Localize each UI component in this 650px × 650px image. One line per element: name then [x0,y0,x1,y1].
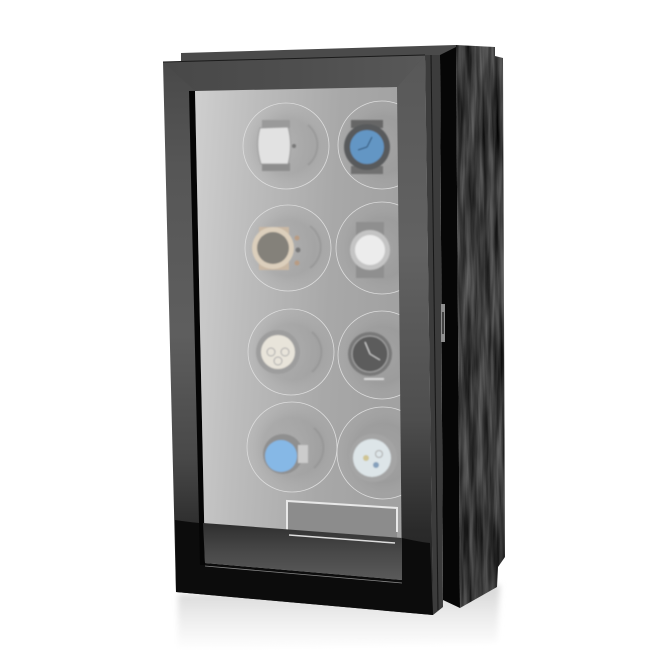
watch: blue dial [344,120,390,174]
glass window [195,87,402,580]
inner shadow of the frame [189,91,205,565]
top strip of cabinet [181,45,456,64]
cabinet body [163,40,510,615]
inner rotor arcs [308,125,323,468]
door lock clasp [441,304,445,342]
name plate [287,501,397,545]
floor shadow [178,585,500,650]
door hinge edge [425,55,443,615]
winder rotors and watches [242,100,402,500]
watch: light blue dial [263,434,308,474]
watch: white dial [350,222,390,278]
watch: square silver [258,120,296,171]
door frame [163,55,433,615]
winder rotor rings [242,100,402,500]
name plate reflection line [289,535,395,543]
lower frame highlight [205,566,402,583]
watch: dark chronograph [348,332,392,380]
wood side panel [456,45,505,608]
dark lower reflection on the glass [203,523,402,580]
watch: rose gold [252,227,300,270]
watch: pale multi-dial [352,438,392,480]
dark gap between door and body [440,47,460,608]
glossy lower frame band [175,520,433,615]
watch: white chronograph [256,330,300,374]
product photo: watch winder cabinet [163,45,505,635]
